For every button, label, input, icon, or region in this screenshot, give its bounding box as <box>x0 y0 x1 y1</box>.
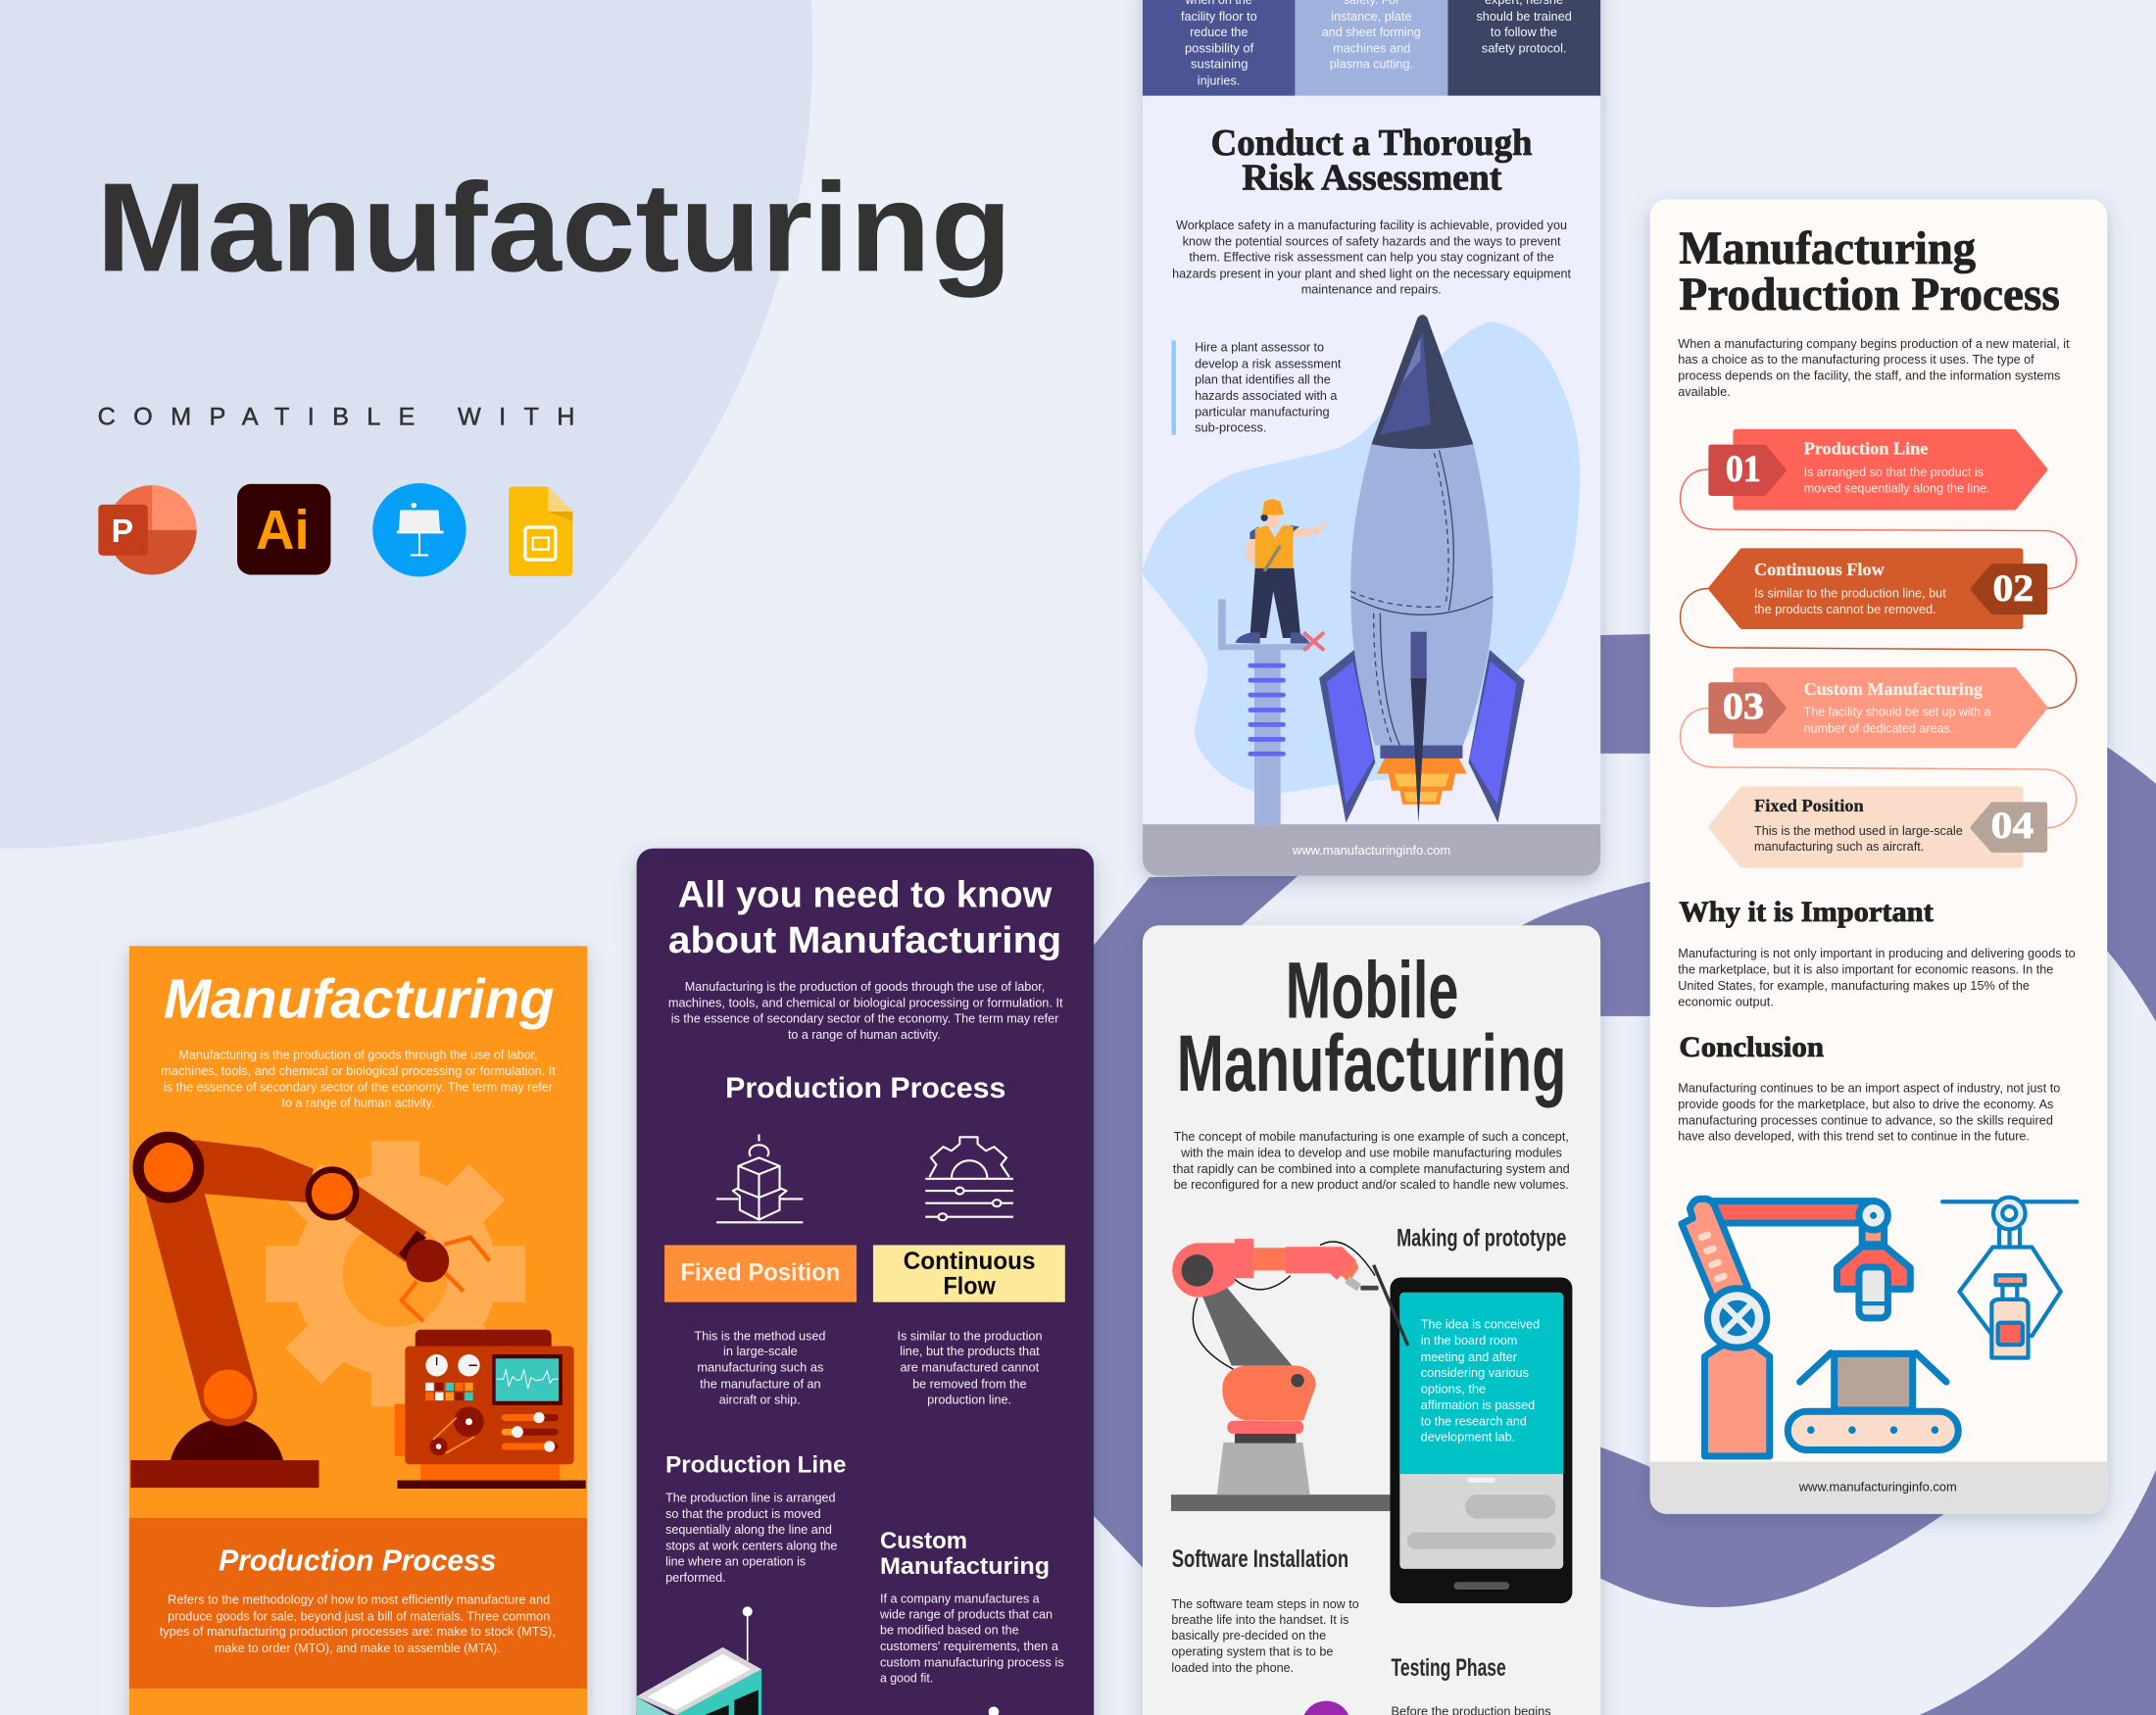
background swirl bands <box>1093 634 2156 1715</box>
text: process intro: process depends on the facility, the staff, and the information systems <box>1678 368 2060 383</box>
text: phone prototype: development lab. <box>1421 1429 1515 1444</box>
panel: manufacturing production process card <box>1650 199 2107 1514</box>
strip: safety tips: should be trained <box>1476 9 1572 24</box>
step 04: fixed position <box>1711 789 2044 865</box>
illustration: rocket <box>1319 315 1525 822</box>
step 02: continuous flow: 02 <box>1992 567 2034 610</box>
text: production process body: make to order (MTO), and make to assemble (MTA). <box>215 1641 501 1655</box>
illustration: light blue blob <box>1143 321 1580 794</box>
text: intro: Manufacturing is the production of goods through the use of labor, <box>178 1047 538 1061</box>
heading: mobile manufacturing <box>1177 946 1566 1108</box>
text: why it is important body: Manufacturing is not only important in producing and delivering goods to <box>1678 946 2076 960</box>
text: production process body: Refers to the methodology of how to most efficiently manufacture and <box>168 1592 550 1607</box>
text: production line body: so that the product is moved <box>665 1506 821 1521</box>
text: software installation body: operating system that is to be <box>1171 1643 1333 1658</box>
footer: website: www.manufacturinginfo.com <box>1292 843 1450 858</box>
heading: testing phase: Testing Phase <box>1391 1654 1506 1682</box>
strip: safety tips: sustaining <box>1191 57 1248 72</box>
illustration: phone <box>1374 1265 1572 1603</box>
strip: safety tips: machines and <box>1333 41 1410 56</box>
heading: custom manufacturing <box>880 1528 1050 1580</box>
text: risk assessment intro: know the potential sources of safety hazards and the ways to prevent <box>1183 233 1561 248</box>
text: continuous flow description <box>897 1328 1043 1407</box>
heading: production process: Production Process <box>725 1072 1005 1104</box>
text: phone prototype: considering various <box>1421 1365 1529 1380</box>
text: custom manufacturing body: If a company manufactures a <box>880 1591 1041 1605</box>
text: mobile intro: be reconfigured for a new product and/or scaled to handle new volumes. <box>1174 1177 1569 1192</box>
text: phone prototype: to the research and <box>1421 1413 1527 1428</box>
button: continuous flow: Continuous <box>904 1248 1036 1275</box>
heading: manufacturing: Manufacturing <box>164 967 554 1029</box>
step 04: fixed position: manufacturing such as aircraft. <box>1754 839 1924 854</box>
illustration: worker <box>1236 500 1328 644</box>
text: continuous flow description: Is similar to the production <box>897 1328 1043 1343</box>
heading: conduct a thorough risk assessment: Risk Assessment <box>1242 158 1502 199</box>
callout: plant assessor note <box>1171 339 1342 435</box>
text: production process body <box>160 1592 556 1655</box>
footer: website <box>1650 1461 2107 1514</box>
text: intro: machines, tools, and chemical or biological processing or formulation. It <box>668 995 1063 1009</box>
icon: illustrator: Ai <box>256 499 310 561</box>
text: software installation body <box>1171 1596 1359 1675</box>
button: continuous flow <box>873 1245 1065 1302</box>
text: why it is important body: economic output. <box>1678 994 1774 1008</box>
footer: website <box>1143 824 1600 876</box>
heading: conduct a thorough risk assessment <box>1211 122 1532 199</box>
strip: safety tips: possibility of <box>1185 41 1254 56</box>
text: software installation body: basically pre-decided on the <box>1171 1628 1326 1642</box>
text: conclusion body <box>1678 1081 2060 1143</box>
band: production process <box>129 1518 587 1689</box>
panel: rocket risk assessment card <box>1143 0 1600 876</box>
callout: plant assessor note: hazards associated with a <box>1195 388 1338 403</box>
text: process intro: has a choice as to the manufacturing process it uses. The type of <box>1678 352 2034 367</box>
step 02: continuous flow: Is similar to the production line, but <box>1754 585 1946 600</box>
text: process intro: When a manufacturing company begins production of a new material, it <box>1678 336 2070 351</box>
text: production line body: sequentially along the line and <box>665 1522 832 1537</box>
text: risk assessment intro: Workplace safety in a manufacturing facility is achievable, provided you <box>1176 218 1567 232</box>
strip: safety tips: instance, plate <box>1331 9 1412 24</box>
text: phone prototype: The idea is conceived <box>1421 1317 1540 1332</box>
step 03: custom manufacturing: 03 <box>1723 686 1764 728</box>
illustration: robot arm <box>130 1132 489 1488</box>
background circle <box>0 0 812 849</box>
illustration: control machine <box>395 1330 586 1489</box>
text: mobile intro: The concept of mobile manufacturing is one example of such a concept, <box>1174 1129 1569 1144</box>
text: mobile intro: that rapidly can be combined into a complete manufacturing system and <box>1173 1161 1570 1176</box>
text: production line body: The production line is arranged <box>665 1490 835 1504</box>
text: custom manufacturing body: custom manufacturing process is <box>880 1654 1064 1669</box>
heading: production line: Production Line <box>665 1452 846 1479</box>
text: fixed position description: aircraft or ship. <box>719 1393 801 1407</box>
heading: conclusion: Conclusion <box>1679 1032 1824 1063</box>
text: intro: is the essence of secondary sector of the economy. The term may refer <box>164 1079 554 1094</box>
text: production process body: produce goods for sale, beyond just a bill of materials. Three common <box>168 1609 550 1624</box>
step 02: continuous flow: the products cannot be removed. <box>1754 602 1936 616</box>
text: custom manufacturing body: be modified based on the <box>880 1623 1019 1638</box>
text: phone prototype: meeting and after <box>1421 1349 1518 1364</box>
footer: website: www.manufacturinginfo.com <box>1798 1480 1957 1494</box>
text: intro: to a range of human activity. <box>788 1027 941 1042</box>
text: why it is important body <box>1678 946 2076 1008</box>
text: intro: machines, tools, and chemical or biological processing or formulation. It <box>161 1063 556 1078</box>
heading: all you need to know: about Manufacturing <box>668 920 1061 961</box>
text: mobile intro <box>1173 1129 1570 1192</box>
panel: mobile manufacturing card <box>1143 925 1600 1715</box>
button: continuous flow: Flow <box>943 1272 996 1299</box>
text: risk assessment intro <box>1172 218 1571 297</box>
button: fixed position: Fixed Position <box>681 1259 840 1287</box>
text: software installation body: loaded into the phone. <box>1171 1660 1294 1675</box>
text: intro <box>668 979 1063 1042</box>
step 03: custom manufacturing: The facility should be set up with a <box>1804 705 1991 719</box>
step 02: continuous flow <box>1711 551 2044 626</box>
icon: box on line <box>716 1135 803 1222</box>
text: phone prototype <box>1421 1317 1540 1444</box>
text: custom manufacturing body: a good fit. <box>880 1671 933 1686</box>
heading: mobile manufacturing: Manufacturing <box>1177 1019 1566 1108</box>
icon: google slides <box>509 487 572 576</box>
strip: safety tips: facility floor to <box>1181 9 1257 24</box>
text: production line body: performed. <box>665 1570 726 1585</box>
strip: safety tips: and sheet forming <box>1322 24 1421 39</box>
text: risk assessment intro: them. Effective risk assessment can help you stay cognizant of the <box>1189 250 1554 265</box>
strip: safety tips <box>1143 0 1600 96</box>
text: continuous flow description: be removed from the <box>912 1376 1027 1391</box>
illustration: gear <box>266 1142 525 1406</box>
strip: safety tips: reduce the <box>1190 24 1248 39</box>
text: fixed position description: This is the method used <box>695 1328 825 1343</box>
text: production line body: stops at work centers along the <box>665 1538 837 1552</box>
text: phone prototype: in the board room <box>1421 1333 1517 1348</box>
text: mobile intro: with the main idea to develop and use mobile manufacturing modules <box>1180 1146 1562 1160</box>
step 02: continuous flow: Continuous Flow <box>1754 560 1886 579</box>
text: process intro <box>1678 336 2070 399</box>
text: conclusion body: provide goods for the marketplace, but also to drive the economy. As <box>1678 1097 2053 1111</box>
heading: all you need to know <box>668 874 1061 961</box>
connector lines <box>1681 469 2077 828</box>
text: why it is important body: United States, for example, manufacturing makes up 15% of the <box>1678 978 2030 993</box>
text: fixed position description: manufacturing such as <box>697 1360 823 1375</box>
text: software installation body: The software team steps in now to <box>1171 1596 1359 1611</box>
text: intro: Manufacturing is the production of goods through the use of labor, <box>685 979 1045 994</box>
heading: mobile manufacturing: Mobile <box>1286 946 1458 1035</box>
text: phone prototype: affirmation is passed <box>1421 1397 1535 1412</box>
text: why it is important body: the marketplace, but it is also important for economic reasons. In the <box>1678 961 2053 976</box>
text: conclusion body: Manufacturing continues to be an import aspect of industry, not just to <box>1678 1081 2060 1096</box>
text: phone prototype: options, the <box>1421 1381 1486 1396</box>
text: risk assessment intro: hazards present in your plant and shed light on the necessary equipment <box>1172 266 1571 280</box>
main title: Manufacturing <box>96 157 1012 298</box>
text: custom manufacturing body <box>879 1591 1064 1686</box>
callout: plant assessor note: Hire a plant assessor to <box>1195 339 1324 354</box>
callout: plant assessor note: plan that identifies all the <box>1195 371 1331 386</box>
text: production process body: types of manufacturing production processes are: make to stock (MTS), <box>160 1624 556 1639</box>
panel: purple all you need to know card <box>636 849 1094 1715</box>
text: continuous flow description: are manufactured cannot <box>900 1360 1040 1375</box>
heading: manufacturing production process: Manufacturing <box>1679 222 1976 274</box>
icon: keynote <box>372 483 466 576</box>
text: intro <box>161 1047 556 1109</box>
text: production line body: line where an operation is <box>665 1554 806 1569</box>
illustration: outline bottle gripper <box>1942 1198 2077 1358</box>
step 01: production line: moved sequentially along the line. <box>1804 480 1990 495</box>
text: custom manufacturing body: customers' requirements, then a <box>880 1639 1059 1653</box>
heading: manufacturing production process <box>1679 222 2060 320</box>
heading: making of prototype: Making of prototype <box>1396 1225 1566 1252</box>
text: fixed position description: in large-scale <box>723 1344 798 1358</box>
callout: plant assessor note: develop a risk assessment <box>1195 356 1342 370</box>
icon: powerpoint <box>98 485 197 574</box>
step 04: fixed position: Fixed Position <box>1754 796 1864 815</box>
text: fixed position description: the manufacture of an <box>700 1376 821 1391</box>
text: intro: to a range of human activity. <box>282 1095 434 1109</box>
illustration: outline robot arm and conveyor <box>1682 1199 1958 1456</box>
text: software installation body: breathe life into the handset. It is <box>1171 1612 1348 1627</box>
step 04: fixed position: 04 <box>1991 805 2034 847</box>
heading: software installation: Software Installation <box>1172 1545 1348 1573</box>
callout: plant assessor note: particular manufacturing <box>1195 404 1330 418</box>
text: conclusion body: have also developed, with this trend set to continue in the future. <box>1678 1128 2030 1143</box>
text: intro: is the essence of secondary sector of the economy. The term may refer <box>671 1011 1059 1026</box>
strip: safety tips: safety protocol. <box>1482 41 1567 56</box>
step 01: production line <box>1711 432 2044 508</box>
text: continuous flow description: production line. <box>927 1393 1011 1407</box>
panel: orange manufacturing card <box>129 946 587 1715</box>
step 03: custom manufacturing: Custom Manufacturing <box>1804 679 1983 699</box>
icon: powerpoint: P <box>112 514 133 550</box>
heading: custom manufacturing: Manufacturing <box>880 1553 1050 1580</box>
heading: why it is important: Why it is Important <box>1679 897 1934 928</box>
heading: conduct a thorough risk assessment: Conduct a Thorough <box>1211 122 1532 164</box>
heading: manufacturing production process: Production Process <box>1679 269 2060 320</box>
strip: safety tips: injuries. <box>1198 73 1240 87</box>
icon: gear and sliders <box>925 1137 1013 1220</box>
text: process intro: available. <box>1678 384 1731 399</box>
text: risk assessment intro: maintenance and repairs. <box>1301 282 1442 297</box>
text: production line body <box>665 1490 837 1585</box>
step 01: production line: 01 <box>1726 448 1761 490</box>
text: conclusion body: manufacturing processes continue to advance, so the skills required <box>1678 1112 2053 1127</box>
illustration: robot arm <box>1171 1239 1391 1511</box>
callout: plant assessor note: sub-process. <box>1195 420 1267 435</box>
compatible with label: COMPATIBLE WITH <box>98 404 574 431</box>
step 01: production line: Is arranged so that the product is <box>1804 465 1984 479</box>
icon: purple circle <box>1301 1701 1351 1715</box>
step 03: custom manufacturing <box>1711 670 2044 745</box>
step 01: production line: Production Line <box>1804 438 1928 458</box>
icon: illustrator <box>237 484 330 574</box>
heading: production process: Production Process <box>219 1543 497 1577</box>
strip: safety tips: to follow the <box>1491 24 1557 39</box>
illustration: platform <box>1218 599 1324 824</box>
button: fixed position <box>664 1245 857 1302</box>
step 04: fixed position: This is the method used in large-scale <box>1754 823 1963 838</box>
text: custom manufacturing body: wide range of products that can <box>879 1607 1053 1622</box>
text: continuous flow description: line, but the products that <box>900 1344 1040 1358</box>
strip: safety tips: plasma cutting. <box>1330 57 1413 72</box>
text: fixed position description <box>695 1328 825 1407</box>
step 03: custom manufacturing: number of dedicated areas. <box>1804 720 1953 735</box>
illustration: factory building <box>636 1606 999 1715</box>
heading: custom manufacturing: Custom <box>880 1528 967 1554</box>
heading: all you need to know: All you need to know <box>678 874 1053 915</box>
